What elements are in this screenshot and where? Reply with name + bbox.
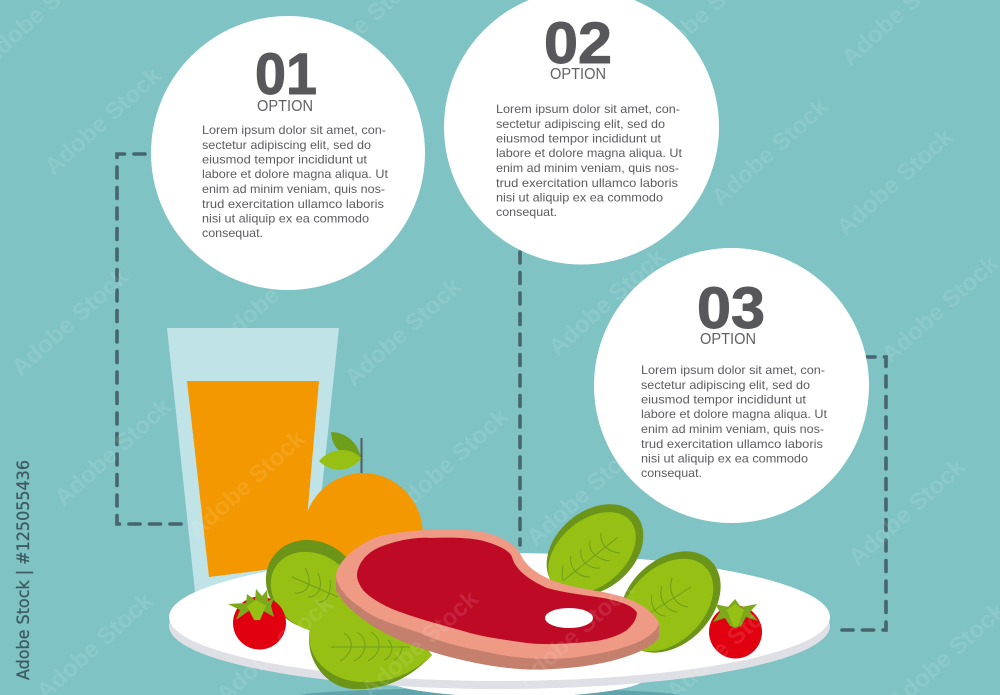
dashed connector: option 3 to plate (838, 357, 886, 630)
number 01: 01 (255, 42, 317, 107)
option 1 body text (202, 123, 389, 240)
watermark: Adobe Stock repeats on background: Adobe Stock (6, 263, 134, 382)
dashed connector: option 2 to plate (518, 252, 522, 545)
option 2 body text: sectetur adipiscing elit, sed do (496, 117, 665, 131)
option 2 body text: trud exercitation ullamco laboris (496, 176, 678, 190)
option 1 label: OPTION (257, 98, 313, 115)
stock id vertical text: Adobe Stock | #125055436 (14, 460, 34, 680)
watermark: Adobe Stock repeats on background: Adobe Stock (339, 273, 467, 392)
watermark: Adobe Stock repeats on background: Adobe Stock (49, 393, 177, 512)
panel: option 2 (444, 0, 719, 264)
option 3 body text (641, 363, 828, 480)
option 2 label: OPTION (550, 66, 606, 83)
icon: steak (336, 529, 659, 670)
icon: orange with leaves (303, 432, 423, 597)
option 3 body text: Lorem ipsum dolor sit amet, con- (641, 363, 825, 377)
watermark: Adobe Stock repeats on background: Adobe Stock (39, 62, 167, 181)
icon: tomato left (228, 589, 286, 650)
icon: lettuce leaf back left (248, 522, 378, 649)
watermark: Adobe Stock repeats on background: Adobe Stock (843, 453, 971, 572)
watermark: Adobe Stock repeats on background: Adobe Stock (831, 123, 959, 242)
watermark: Adobe Stock repeats on background: Adobe Stock (386, 403, 514, 522)
option 3 body text: eiusmod tempor incididunt ut (641, 392, 807, 406)
icon: lettuce leaf back right 1 (529, 485, 661, 615)
option 3 label: OPTION (700, 331, 756, 348)
dashed connector: option 1 to glass (117, 154, 190, 524)
option 2 body text: enim ad minim veniam, quis nos- (496, 161, 679, 175)
option 3 body text: sectetur adipiscing elit, sed do (641, 378, 810, 392)
option 2 body text: consequat. (496, 205, 557, 219)
watermark: Adobe Stock repeats over food: Adobe Stock (511, 575, 639, 694)
number 02: 02 (544, 11, 612, 76)
icon: tomato right (709, 599, 762, 658)
icon: lettuce leaf back right 2 (599, 531, 741, 673)
option 1 body text: labore et dolore magna aliqua. Ut (202, 167, 389, 181)
option 2 body text: eiusmod tempor incididunt ut (496, 132, 662, 146)
option 3 body text: enim ad minim veniam, quis nos- (641, 422, 824, 436)
option 1 body text: consequat. (202, 226, 263, 240)
option 1 body text: nisi ut aliquip ex ea commodo (202, 212, 369, 226)
option 3 body text: labore et dolore magna aliqua. Ut (641, 407, 828, 421)
panel: option 1 (151, 16, 425, 290)
option 1 body text: eiusmod tempor incididunt ut (202, 152, 368, 166)
option 2 body text: labore et dolore magna aliqua. Ut (496, 146, 683, 160)
icon: plate (169, 553, 830, 695)
watermark: Adobe Stock repeats over food: Adobe Stock (183, 425, 311, 544)
option 1 body text: sectetur adipiscing elit, sed do (202, 138, 371, 152)
option 1 body text: Lorem ipsum dolor sit amet, con- (202, 123, 386, 137)
icon: glass of orange juice (167, 328, 339, 592)
option 1 body text: enim ad minim veniam, quis nos- (202, 182, 385, 196)
option 3 body text: trud exercitation ullamco laboris (641, 437, 823, 451)
watermark: Adobe Stock repeats over food (183, 425, 789, 695)
option 2 body text (496, 102, 683, 219)
panel: option 3 (594, 248, 869, 523)
watermark: Adobe Stock repeats on background: Adobe Stock (211, 233, 339, 352)
option 3 body text: consequat. (641, 466, 702, 480)
option 2 body text: nisi ut aliquip ex ea commodo (496, 190, 663, 204)
watermark: Adobe Stock repeats on background: Adobe Stock (876, 250, 1000, 369)
option 1 body text: trud exercitation ullamco laboris (202, 197, 384, 211)
watermark: Adobe Stock repeats on background: Adobe Stock (543, 243, 671, 362)
option 3 body text: nisi ut aliquip ex ea commodo (641, 452, 808, 466)
icon: lettuce leaf front (309, 611, 432, 689)
number 03: 03 (697, 276, 765, 341)
option 2 body text: Lorem ipsum dolor sit amet, con- (496, 102, 680, 116)
watermark: Adobe Stock repeats on background: Adobe Stock (521, 433, 649, 552)
watermark: Adobe Stock repeats on background: Adobe Stock (706, 93, 834, 212)
